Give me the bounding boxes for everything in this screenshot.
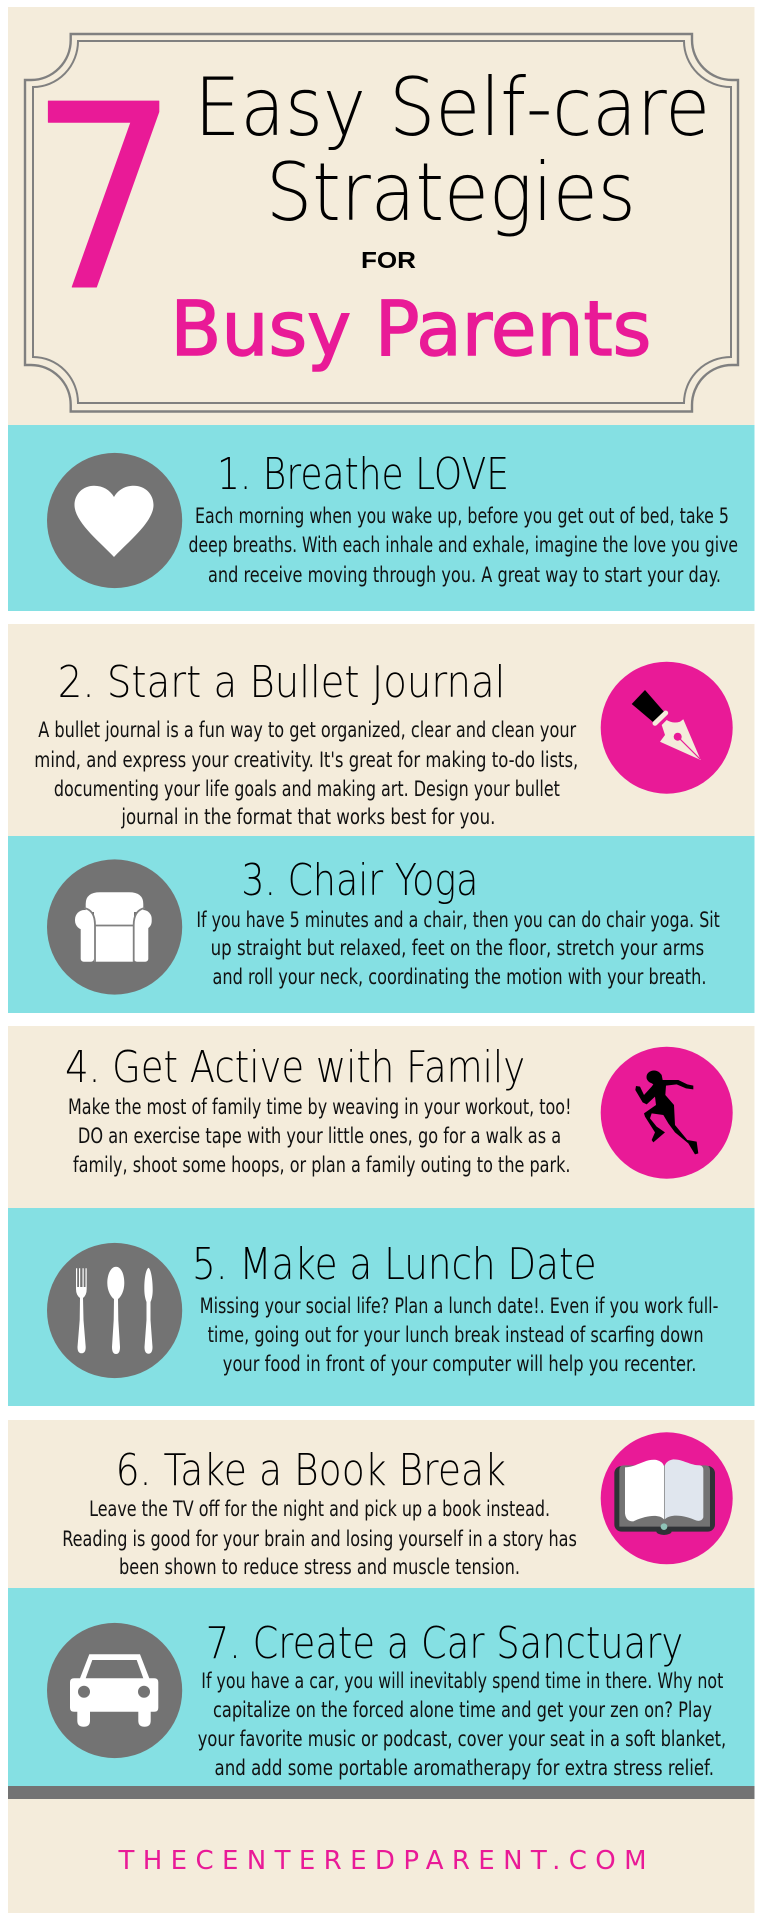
body text	[198, 1669, 726, 1780]
heading: 6. Take a Book Break	[116, 1445, 506, 1496]
heading: 5. Make a Lunch Date	[192, 1239, 596, 1290]
body text: A bullet journal is a fun way to get organized, clear and clean your	[38, 718, 576, 742]
panel: 3 Chair Yoga	[8, 836, 754, 1013]
body text: family, shoot some hoops, or plan a family outing to the park.	[73, 1153, 570, 1177]
body text: DO an exercise tape with your little ones, go for a walk as a	[78, 1124, 561, 1148]
body text	[188, 504, 738, 587]
icon: cutlery	[47, 1243, 182, 1378]
subtitle: for: FOR	[361, 247, 416, 273]
panel: 2 Start a Bullet Journal	[8, 624, 754, 836]
panel: footer	[8, 1799, 754, 1913]
panel: 7 Create a Car Sanctuary	[8, 1588, 754, 1786]
body text	[62, 1497, 577, 1579]
panel: 5 Make a Lunch Date	[8, 1208, 754, 1406]
body text	[200, 1294, 718, 1376]
heading: 1. Breathe LOVE	[217, 449, 509, 500]
icon: open book	[601, 1432, 733, 1564]
heading: 4. Get Active with Family	[65, 1042, 525, 1093]
body text: been shown to reduce stress and muscle tension.	[119, 1555, 520, 1579]
panel: header	[8, 7, 754, 425]
heading: 7. Create a Car Sanctuary	[206, 1618, 683, 1669]
icon: car	[47, 1623, 182, 1758]
footer url: THECENTEREDPARENT.COM	[118, 1846, 646, 1876]
ornamental frame	[25, 34, 738, 412]
icon: runner	[601, 1047, 733, 1179]
icon: armchair	[47, 859, 182, 995]
body text	[196, 908, 720, 989]
panel: 4 Get Active with Family	[8, 1026, 754, 1208]
heading: 2. Start a Bullet Journal	[58, 657, 505, 708]
title: Easy Self-care	[194, 61, 710, 154]
big pink 7: 7	[29, 51, 179, 348]
title	[194, 61, 710, 239]
icon: fountain pen	[601, 662, 733, 794]
body text	[34, 718, 578, 829]
panel: 6 Take a Book Break	[8, 1420, 754, 1588]
heading: 3. Chair Yoga	[241, 855, 478, 906]
body text: Reading is good for your brain and losing yourself in a story has	[62, 1527, 577, 1551]
divider bar	[8, 1786, 754, 1799]
subtitle: busy parents: Busy Parents	[170, 284, 651, 373]
body text: Leave the TV off for the night and pick up a book instead.	[89, 1497, 550, 1521]
title: Strategies	[266, 146, 636, 239]
body text: documenting your life goals and making art. Design your bullet	[54, 777, 560, 801]
body text: Make the most of family time by weaving in your workout, too!	[68, 1095, 572, 1119]
body text: mind, and express your creativity. It's great for making to-do lists,	[34, 748, 578, 772]
icon: heart	[47, 453, 182, 588]
panel: 1 Breathe LOVE	[8, 425, 754, 611]
body text: journal in the format that works best for you.	[121, 805, 495, 829]
body text	[68, 1095, 572, 1177]
